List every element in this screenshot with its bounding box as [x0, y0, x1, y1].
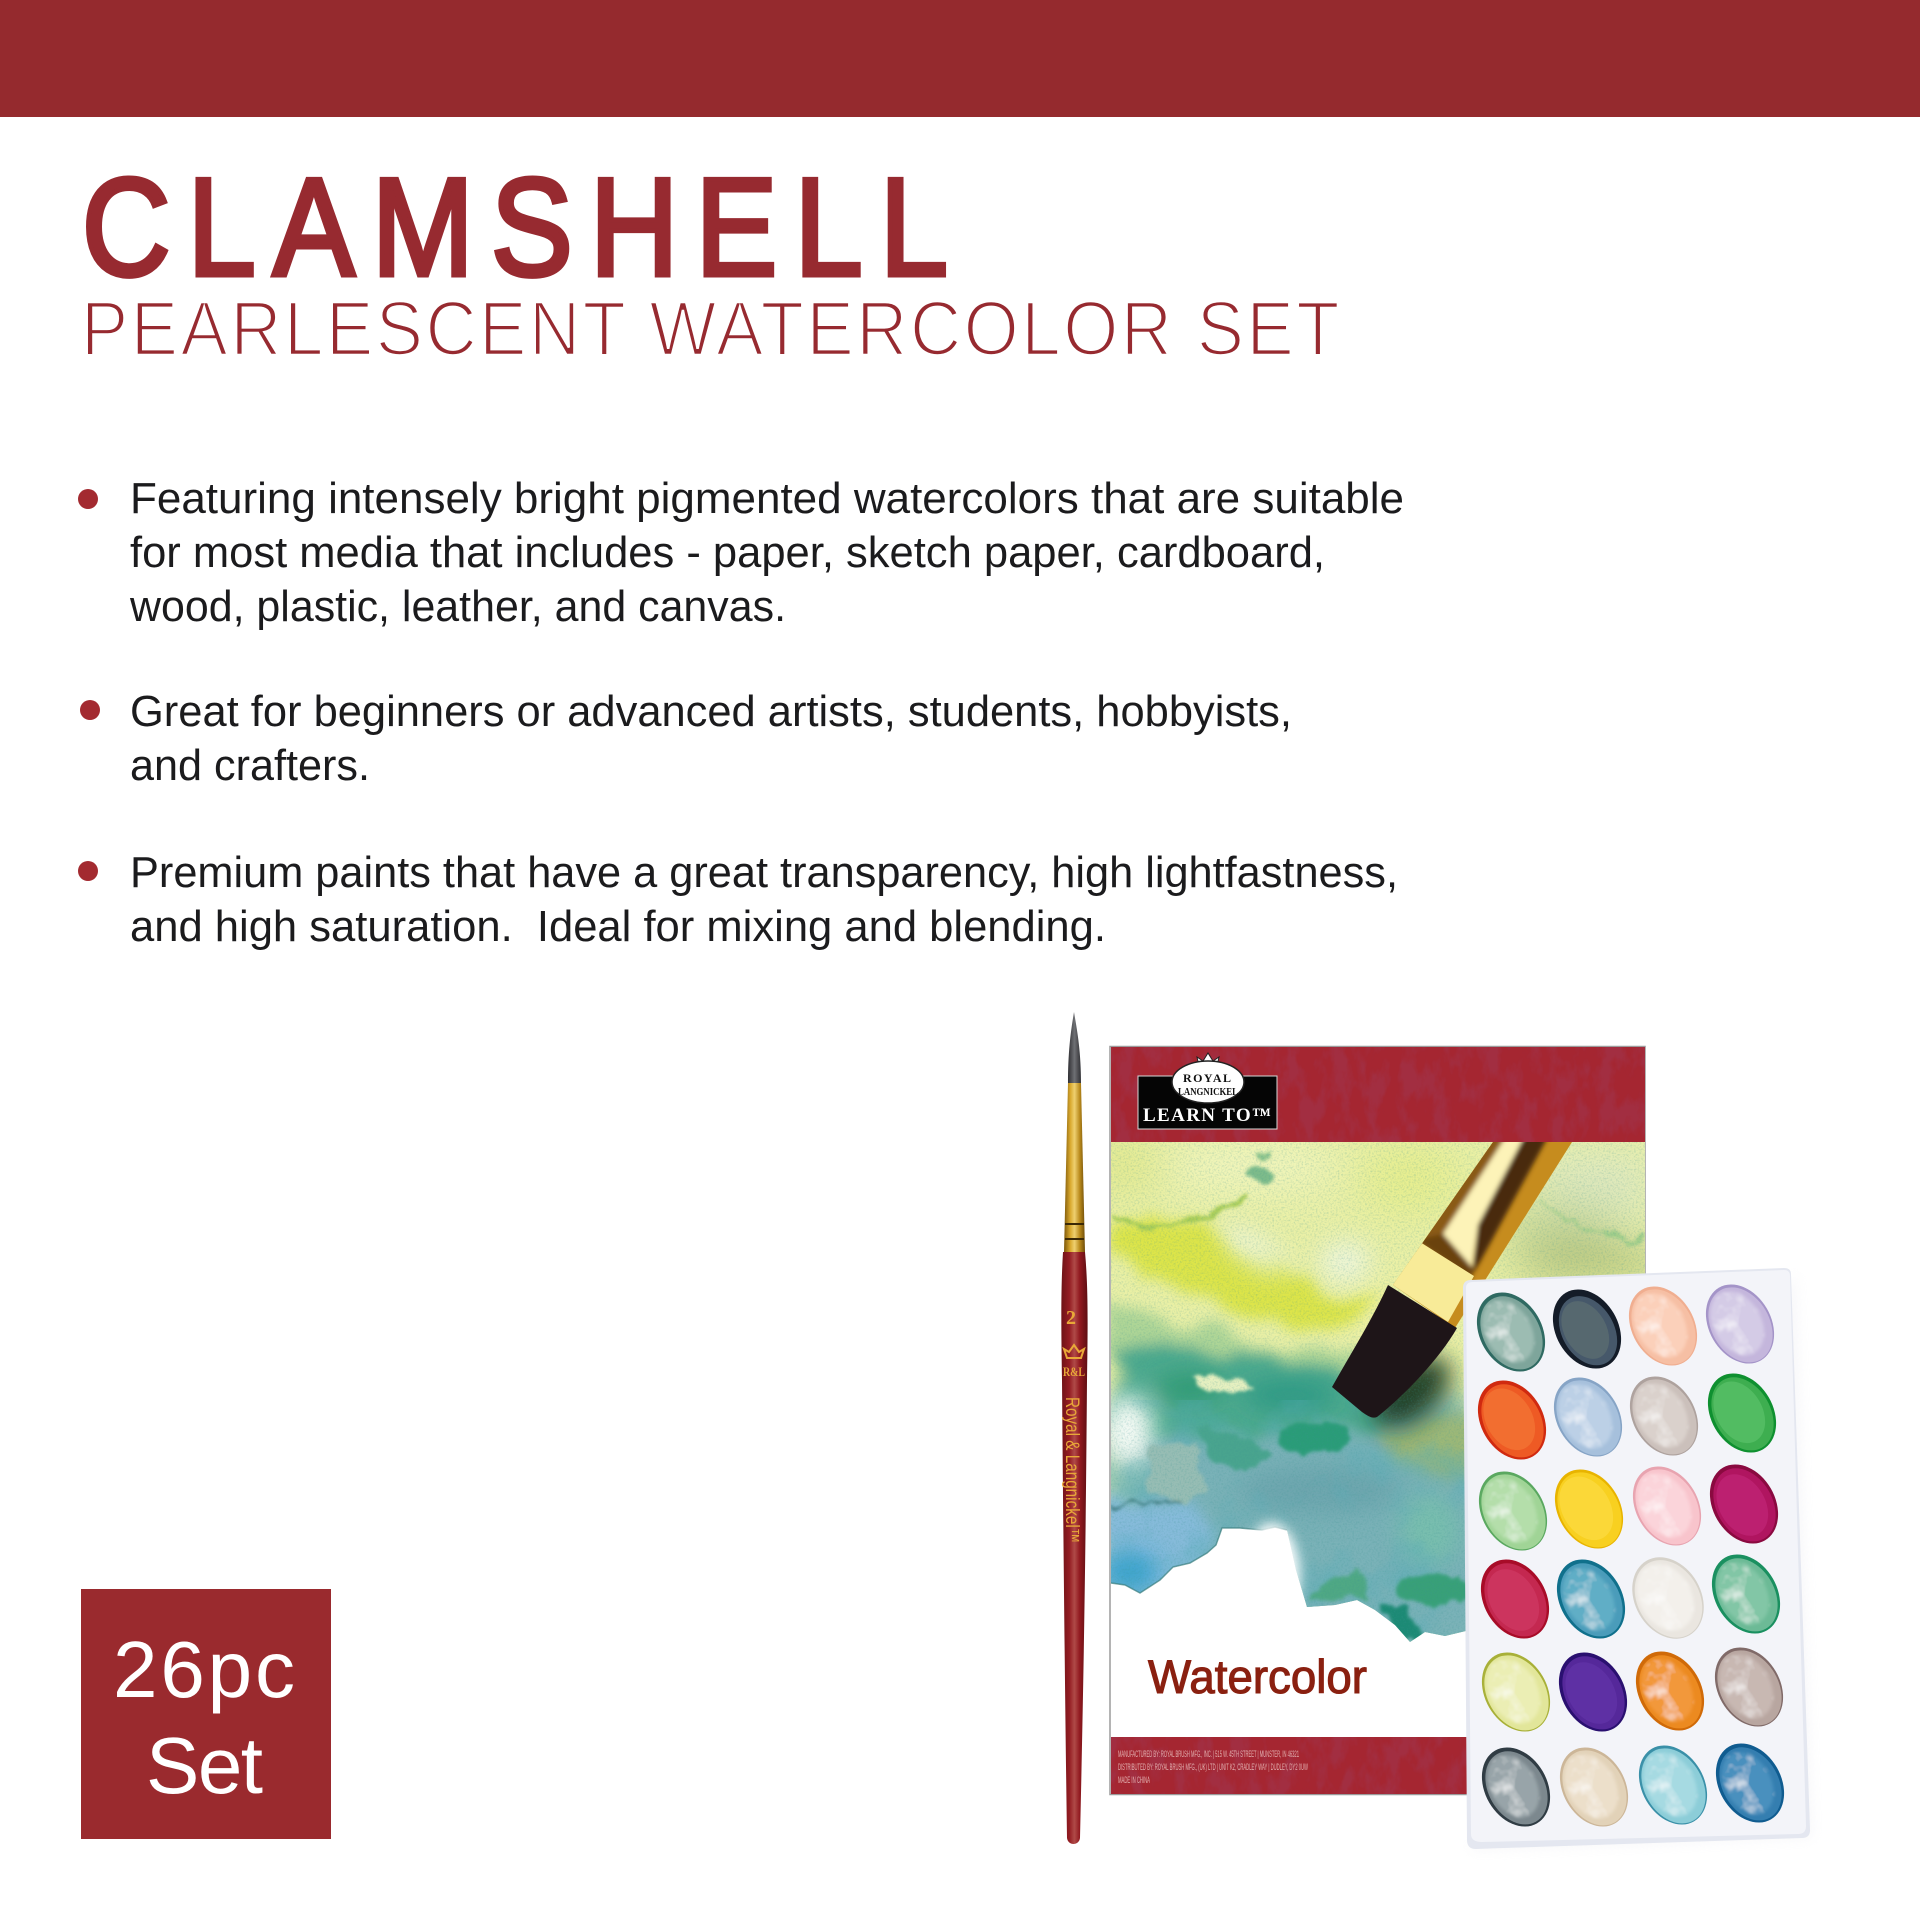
bullet 3: and high saturation. Ideal for mixing and blending. — [130, 902, 1106, 951]
bullet 1: for most media that includes - paper, sketch paper, cardboard, — [130, 528, 1325, 577]
logo: Royal & Langnickel Learn To: LANGNICKEL — [1178, 1087, 1238, 1098]
logo oval — [1172, 1061, 1244, 1103]
tonal blotches — [1111, 1400, 1464, 1631]
badge: 26pc Set — [81, 1589, 331, 1839]
brush brand name: Royal & Langnickel™ — [1061, 1397, 1082, 1543]
soft white fade — [1244, 1523, 1300, 1627]
tray shadow — [1470, 1272, 1812, 1850]
bullet 2: and crafters. — [130, 741, 370, 790]
bullet 2 — [80, 687, 1292, 790]
row 3 pans — [1465, 1452, 1792, 1563]
brush handle — [1061, 1252, 1088, 1844]
book bottom band: MANUFACTURED BY: ROYAL BRUSH MFG., INC. | 515 W. 45TH STREET | MUNSTER, IN 46321 — [1118, 1749, 1299, 1759]
wash bottom edge — [1111, 1527, 1287, 1593]
flat brush ferrule — [1393, 1142, 1572, 1327]
flat brush bristles — [1332, 1285, 1457, 1418]
row 2 pans — [1464, 1361, 1790, 1472]
bullet 3 — [78, 848, 1398, 951]
clamshell paint tray — [1463, 1268, 1812, 1850]
row 1 pans — [1463, 1272, 1788, 1384]
row 6 pans — [1468, 1731, 1798, 1839]
LEARN TO: LEARN TO™ — [1143, 1105, 1271, 1126]
logo crown — [1197, 1053, 1219, 1066]
logo: Royal & Langnickel Learn To — [1138, 1053, 1277, 1129]
flat brush on cover — [1332, 1135, 1580, 1418]
tray body — [1463, 1268, 1810, 1849]
subtitle: PEARLESCENT WATERCOLOR SET: PEARLESCENT WATERCOLOR SET — [81, 285, 1340, 372]
brush size number: 2 — [1066, 1307, 1076, 1329]
book bottom band: DISTRIBUTED BY: ROYAL BRUSH MFG., (UK) LTD | UNIT K2, CRADLEY WAY | DUDLEY, DY2 0UW — [1118, 1762, 1308, 1772]
book title: Watercolor: Watercolor — [1148, 1650, 1367, 1703]
paint grain — [1110, 1142, 1645, 1662]
row 4 pans — [1467, 1542, 1794, 1652]
flat brush pale band — [1393, 1242, 1474, 1322]
logo lettering: ROYAL — [1183, 1071, 1231, 1085]
bullet 1: Featuring intensely bright pigmented watercolors that are suitable — [130, 474, 1404, 523]
watercolor wash illustration — [1085, 1135, 1670, 1665]
book bottom band — [1111, 1737, 1471, 1794]
tray top face — [1466, 1270, 1806, 1842]
row 5 pans — [1468, 1635, 1797, 1744]
bullet list — [78, 474, 1404, 951]
thin round brush — [1061, 1012, 1088, 1844]
brush shadow — [1360, 1343, 1464, 1441]
bullet 1 — [78, 474, 1404, 631]
brush crown mark — [1064, 1345, 1084, 1358]
badge: 26pc Set: Set — [146, 1721, 263, 1810]
book top band — [1111, 1047, 1645, 1142]
brush bristles — [1068, 1012, 1081, 1084]
bullet 2: Great for beginners or advanced artists, students, hobbyists, — [130, 687, 1292, 736]
book bottom band: MADE IN CHINA — [1118, 1775, 1150, 1785]
brush R&amp;L mark: R&L — [1063, 1364, 1085, 1379]
top banner bar — [0, 0, 1920, 117]
book page — [1110, 1046, 1645, 1794]
bullet 3: Premium paints that have a great transparency, high lightfastness, — [130, 848, 1398, 897]
badge: 26pc Set: 26pc — [113, 1625, 295, 1714]
title: CLAMSHELL: CLAMSHELL — [82, 149, 948, 305]
watercolor book — [1085, 1046, 1670, 1794]
brush ferrule — [1064, 1083, 1085, 1252]
bullet 1: wood, plastic, leather, and canvas. — [129, 582, 786, 631]
